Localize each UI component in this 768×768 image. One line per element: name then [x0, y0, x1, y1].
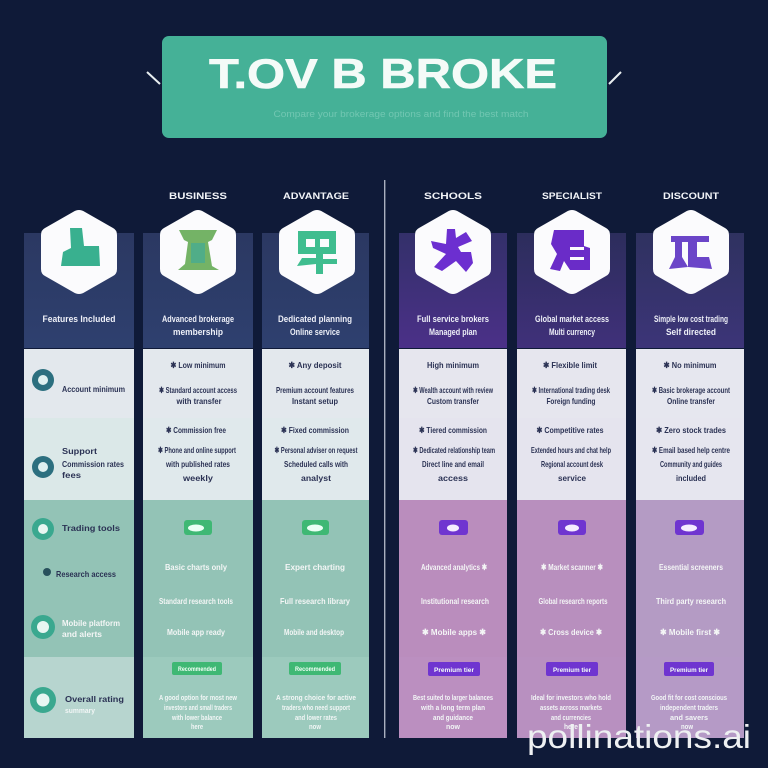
row icon	[30, 687, 56, 713]
row a text: ✱ International trading desk	[532, 385, 610, 395]
rating badge: Recommended	[295, 666, 335, 673]
hexagon icon	[279, 210, 355, 294]
row b text: ✱ Competitive rates	[536, 425, 604, 435]
row d text: here	[564, 724, 578, 731]
row c text: Standard research tools	[159, 596, 233, 606]
row text	[62, 446, 124, 480]
row d text	[276, 695, 356, 731]
row a text: ✱ Standard account access	[159, 385, 237, 395]
panel: column 5	[517, 191, 626, 738]
row text: and alerts	[62, 629, 102, 639]
row d text: and savers	[670, 715, 708, 722]
row b text: Community and guides	[660, 459, 722, 469]
row d text: and guidance	[433, 715, 473, 722]
row d text: now	[446, 724, 461, 731]
column 3 row c	[262, 500, 369, 657]
hexagon icon	[534, 210, 610, 294]
row a text: ✱ Low minimum	[170, 360, 226, 370]
panel: column 1	[24, 210, 134, 738]
watermark: pollinations.ai	[527, 718, 751, 755]
hexagon icon	[41, 210, 117, 294]
column 3 header	[262, 233, 369, 348]
rating badge: Premium tier	[434, 667, 474, 674]
hexagon icon	[653, 210, 729, 294]
row text: Account minimum	[62, 384, 125, 394]
column 3 label: Dedicated planning	[278, 314, 352, 324]
column 2 label: Advanced brokerage	[162, 314, 234, 324]
status badge	[558, 520, 586, 535]
row b text: ✱ Personal adviser on request	[274, 445, 358, 455]
column 3 row b	[262, 418, 369, 500]
row c text: Basic charts only	[165, 562, 227, 572]
row c text: ✱ Mobile first ✱	[660, 627, 721, 637]
row c text: Expert charting	[285, 562, 345, 572]
column 6 label: Simple low cost trading	[654, 314, 728, 324]
column 2 label: membership	[173, 327, 223, 337]
row d text: independent traders	[660, 705, 718, 712]
row d text: Ideal for investors who hold	[531, 695, 611, 702]
panel: column 2	[143, 191, 253, 738]
row b text: ✱ Phone and online support	[158, 445, 236, 455]
row b text: weekly	[182, 473, 213, 483]
subtitle: Compare your brokerage options and find the best match	[274, 109, 528, 119]
column 5 row a	[517, 349, 626, 418]
column 2 row a	[143, 349, 253, 418]
panel: column 6	[636, 191, 744, 738]
row c text: ✱ Market scanner ✱	[541, 562, 604, 572]
column 6 row b	[636, 418, 744, 500]
row b text: ✱ Dedicated relationship team	[413, 445, 495, 455]
column 6 title: DISCOUNT	[663, 191, 720, 201]
row a text: Foreign funding	[546, 396, 596, 406]
column 4 label: Managed plan	[429, 327, 477, 337]
row b text: included	[676, 473, 706, 483]
row c text: Advanced analytics ✱	[421, 562, 488, 572]
row d text: A strong choice for active	[276, 695, 356, 702]
row text: Support	[62, 446, 97, 456]
status badge	[675, 520, 704, 535]
row d text: and currencies	[551, 715, 591, 722]
row a text: Premium account features	[276, 385, 354, 395]
row d text: now	[681, 724, 693, 731]
column 6 row a	[636, 349, 744, 418]
column 4 title: SCHOOLS	[424, 191, 482, 201]
column 5 row b	[517, 418, 626, 500]
row d text: traders who need support	[282, 705, 351, 712]
row d text: Good fit for cost conscious	[651, 695, 727, 702]
row d text: investors and small traders	[164, 705, 232, 712]
row b text: Scheduled calls with	[284, 459, 348, 469]
column 6 row d	[636, 657, 744, 738]
row b text: ✱ Tiered commission	[419, 425, 487, 435]
row b text	[413, 425, 495, 483]
row c text	[656, 562, 726, 637]
row c text: Mobile and desktop	[284, 627, 344, 637]
column 1 label: Features Included	[42, 314, 116, 324]
column 4 row b	[399, 418, 507, 500]
row icon	[32, 456, 54, 478]
panel: column 4	[399, 191, 507, 738]
rating badge: Premium tier	[670, 667, 708, 674]
row d text	[651, 695, 727, 731]
row a text: High minimum	[427, 360, 479, 370]
row a text: ✱ Basic brokerage account	[652, 385, 730, 395]
rating badge: Premium tier	[553, 667, 591, 674]
row d text: now	[309, 724, 321, 731]
column 1 row a	[24, 349, 134, 418]
column 2 row d	[143, 657, 253, 738]
row b text: Regional account desk	[541, 459, 603, 469]
hexagon icon	[415, 210, 491, 294]
row a text: Online transfer	[667, 396, 716, 406]
column 2 row b	[143, 418, 253, 500]
column 3 title: ADVANTAGE	[283, 191, 349, 201]
row c text	[421, 562, 489, 637]
row text: Overall rating	[65, 694, 124, 704]
row b text: ✱ Commission free	[166, 425, 226, 435]
hexagon icon	[160, 210, 236, 294]
column 2 row c	[143, 500, 253, 657]
row d text: with lower balance	[171, 715, 222, 722]
row text: Research access	[56, 569, 116, 579]
column 2 title: BUSINESS	[169, 191, 227, 201]
row d text: Best suited to larger balances	[413, 695, 493, 702]
row a text	[159, 360, 237, 406]
row d text	[531, 695, 611, 731]
row c text: ✱ Mobile apps ✱	[422, 627, 487, 637]
row b text: analyst	[301, 473, 331, 483]
column 6 label	[654, 314, 728, 337]
column 2 label	[162, 314, 234, 337]
row b text	[274, 425, 358, 483]
column 5 row c	[517, 500, 626, 657]
row text	[62, 618, 120, 639]
column 4 row d	[399, 657, 507, 738]
column 4 header	[399, 233, 507, 348]
row icon	[32, 369, 54, 391]
rating badge: Recommended	[178, 666, 216, 673]
column 1 row c	[24, 500, 134, 657]
row c text	[280, 562, 350, 637]
row a text	[532, 360, 610, 406]
row a text	[276, 360, 354, 406]
row c text	[538, 562, 608, 637]
column 5 label	[535, 314, 609, 337]
column 3 label	[278, 314, 352, 337]
row text: fees	[62, 470, 81, 480]
row text: Mobile platform	[62, 618, 120, 628]
column 2 header	[143, 233, 253, 348]
row text: Commission rates	[62, 459, 124, 469]
row a text: with transfer	[176, 396, 222, 406]
row c text: ✱ Cross device ✱	[540, 627, 603, 637]
row d text: here	[191, 724, 203, 731]
row d text: assets across markets	[540, 705, 602, 712]
row a text: ✱ Any deposit	[288, 360, 342, 370]
row c text: Third party research	[656, 596, 726, 606]
center divider	[384, 180, 385, 738]
row d text: A good option for most new	[159, 695, 237, 702]
row a text: Custom transfer	[427, 396, 480, 406]
row c text: Full research library	[280, 596, 350, 606]
column 3 label: Online service	[290, 327, 340, 337]
row b text: ✱ Email based help centre	[652, 445, 730, 455]
left banner tick	[147, 72, 160, 84]
row c text: Institutional research	[421, 596, 489, 606]
column 6 row c	[636, 500, 744, 657]
column 6 header	[636, 233, 744, 348]
row text: summary	[65, 708, 95, 715]
status badge	[302, 520, 329, 535]
column 4 row a	[399, 349, 507, 418]
row c text: Global research reports	[538, 596, 608, 606]
column 3 row d	[262, 657, 369, 738]
column 4 row c	[399, 500, 507, 657]
row a text	[652, 360, 730, 406]
row icon	[32, 518, 54, 540]
column 4 label: Full service brokers	[417, 314, 489, 324]
row c text: Essential screeners	[659, 562, 723, 572]
row a text: ✱ Flexible limit	[543, 360, 597, 370]
column 5 label: Global market access	[535, 314, 609, 324]
column 4 label	[417, 314, 489, 337]
column 1 row d	[24, 657, 134, 738]
row b text: access	[438, 473, 468, 483]
row b text: Direct line and email	[422, 459, 484, 469]
row d text	[413, 695, 493, 731]
column 5 header	[517, 233, 626, 348]
column 5 title: SPECIALIST	[542, 191, 603, 201]
rating badge	[428, 662, 480, 676]
title: T.OV B BROKE	[209, 50, 557, 97]
row a text: ✱ Wealth account with review	[413, 385, 493, 395]
row a text: Instant setup	[292, 396, 338, 406]
row a text: ✱ No minimum	[664, 360, 717, 370]
rating badge	[289, 662, 341, 675]
row b text: Extended hours and chat help	[531, 445, 611, 455]
row text	[65, 694, 124, 715]
row text: Trading tools	[62, 523, 120, 533]
row c text	[159, 562, 233, 637]
row d text: with a long term plan	[420, 705, 485, 712]
row b text: service	[558, 473, 586, 483]
row b text: ✱ Fixed commission	[281, 425, 349, 435]
row b text	[158, 425, 236, 483]
row b text	[652, 425, 730, 483]
status badge	[439, 520, 468, 535]
row icon	[31, 615, 55, 639]
rating badge	[546, 662, 598, 676]
status badge	[184, 520, 212, 535]
row icon	[43, 568, 51, 576]
column 3 row a	[262, 349, 369, 418]
column 5 row d	[517, 657, 626, 738]
column 1 row b	[24, 418, 134, 500]
row d text	[159, 695, 237, 731]
row a text	[413, 360, 493, 406]
row b text: ✱ Zero stock trades	[656, 425, 726, 435]
row d text: and lower rates	[295, 715, 337, 722]
column 1 header	[24, 233, 134, 348]
title banner	[162, 36, 607, 138]
rating badge	[664, 662, 714, 676]
column 6 label: Self directed	[666, 327, 716, 337]
row c text: Mobile app ready	[167, 627, 225, 637]
column 5 label: Multi currency	[549, 327, 595, 337]
panel: column 3	[262, 191, 369, 738]
row b text	[531, 425, 611, 483]
rating badge	[172, 662, 222, 675]
right banner tick	[609, 72, 621, 84]
row b text: with published rates	[165, 459, 230, 469]
